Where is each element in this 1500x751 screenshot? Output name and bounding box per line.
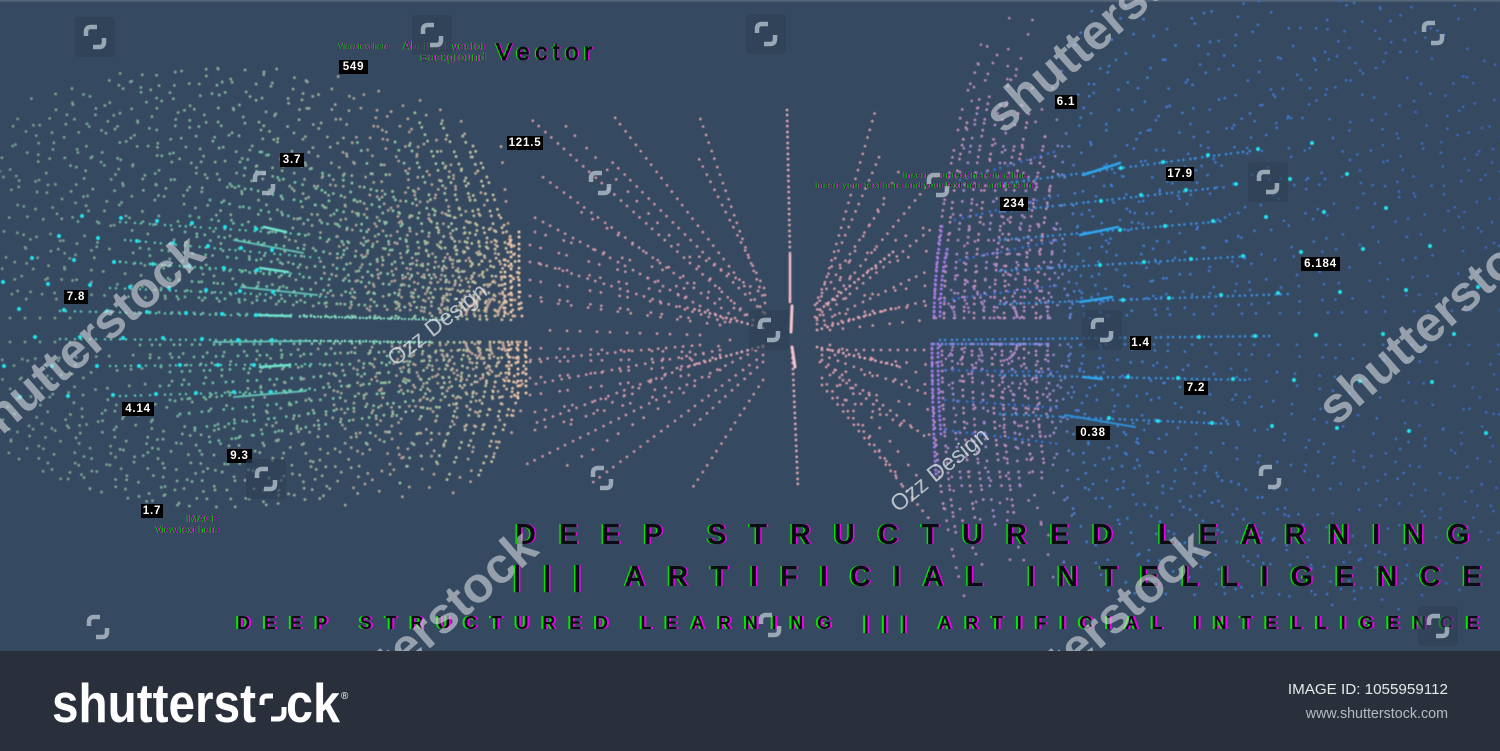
ozz design watermarks: Ozz Design [382,277,492,371]
bright purple sphere edge [932,226,948,474]
data label: 6.1: 6.1 [1057,96,1075,108]
concentric sparse arcs [0,69,505,507]
right blue streaks [1080,163,1120,379]
left cyan points [3,216,273,397]
ozz design watermarks [382,277,994,517]
scattered pink cluster dots [530,225,930,435]
long blue streak [1065,415,1135,427]
data label: 4.14: 4.14 [125,403,151,415]
blue rows of right sphere [934,150,1290,444]
shutterstock watermarks: shutterstock [284,518,548,751]
title line 1: DEEP STRUCTURED LEARNING [515,519,1492,551]
ozz design watermarks: Ozz Design [885,422,994,517]
title line 3 small: DEEP STRUCTURED LEARNING ||| ARTIFICIAL INTELLIGENCE [237,613,1492,633]
caption: image view text here [155,514,220,536]
data label: 7.2: 7.2 [1187,382,1205,394]
data label: 7.8 [64,290,88,304]
top edge line [0,0,1500,2]
teal rows through the cyan points [60,222,440,396]
data label: 1.7: 1.7 [143,505,161,517]
caption: abstract vector background: Background [421,52,486,64]
data label: 549 [339,60,368,74]
title line 2: ||| ARTIFICIAL INTELLIGENCE [513,561,1500,593]
shutterstock logo: shutterst [52,672,256,734]
chart: right sphere dot cloud [934,0,1500,610]
caption: right hemisphere text: Insert your text here in a line [904,170,1028,180]
caption: abstract vector background: Abstract vector [403,41,486,53]
data label: 234: 234 [1003,198,1025,210]
data label: 3.7: 3.7 [283,154,301,166]
data label: 3.7 [280,153,304,167]
data label: 4.14 [122,402,154,416]
pink columns of right sphere [932,45,1058,599]
left streaks [214,227,317,397]
data label: 0.38 [1076,426,1110,440]
heading: vector: Vector [496,39,598,66]
data label: 549: 549 [343,61,364,73]
data label: 6.184: 6.184 [1304,258,1337,270]
data label: 9.3 [227,449,252,463]
caption: abstract vector background [402,41,486,64]
chart: left sphere dot cloud [0,66,526,510]
shutterstock logo: ® [341,691,349,702]
data label: 0.38: 0.38 [1080,427,1106,439]
shutterstock watermarks: shutterstock [955,518,1219,751]
data label: 9.3: 9.3 [230,450,249,462]
data label: 17.9: 17.9 [1167,168,1193,180]
caption: view text here top: View text here [339,42,390,51]
data label: 7.8: 7.8 [67,291,85,303]
tiled logo marks [75,14,1458,646]
data label: 121.5: 121.5 [509,137,541,149]
caption: image view text here: View text here [156,524,219,536]
caption: right hemisphere text: Insert your text here and your text here and text in [816,180,1033,190]
website url: www.shutterstock.com [1306,706,1448,722]
image id: IMAGE ID: 1055959112 [1288,681,1448,698]
chart: central radial pink rays [525,110,930,520]
right cyan points [1100,143,1486,433]
data label: 7.2 [1184,381,1208,395]
data label: 1.4: 1.4 [1131,337,1150,349]
caption: right hemisphere text [816,170,1033,190]
data label: 234 [1000,197,1028,211]
caption: image view text here: IMAGE [187,514,219,525]
concentric blue arcs [990,0,1500,565]
footer bar [0,651,1500,751]
shutterstock logo: ck [286,672,340,734]
